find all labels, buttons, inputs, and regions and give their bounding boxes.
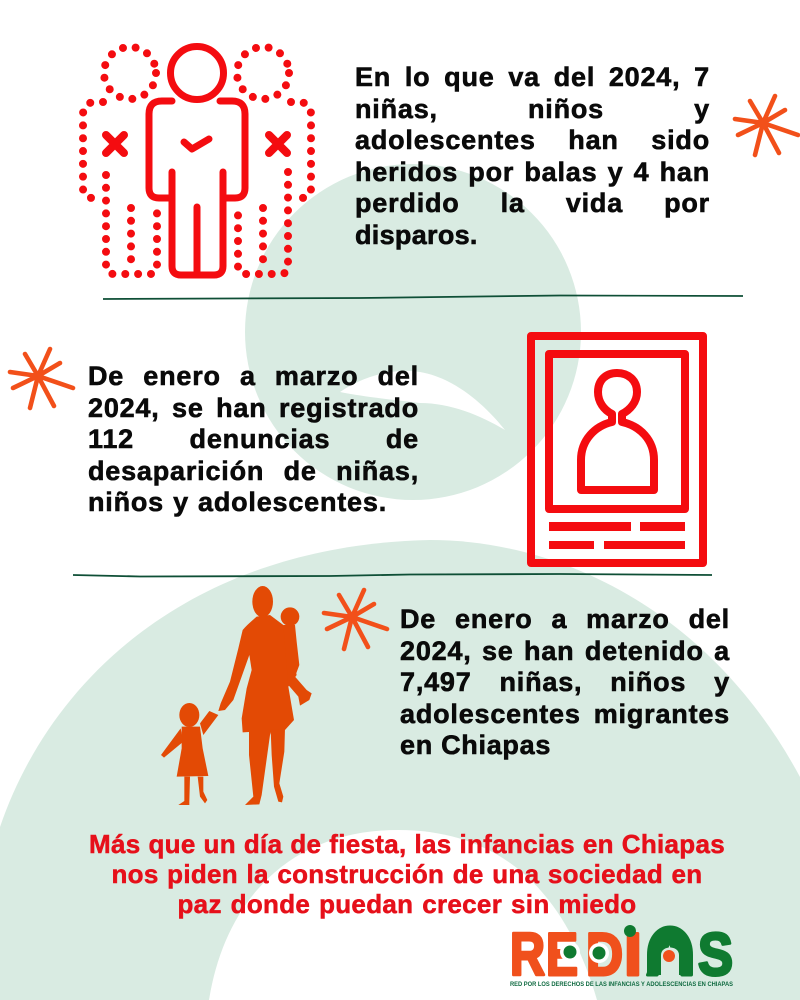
logo: REDIAS: D — [586, 921, 623, 988]
text block: wounded children: En lo que va del 2024, 7 — [355, 62, 710, 92]
text block: wounded children: heridos por balas y 4 han — [355, 157, 710, 187]
text block: disappearance reports: 112 denuncias de — [88, 424, 419, 454]
text block: detained migrants: en Chiapas — [400, 730, 551, 760]
text block: detained migrants: adolescentes migrantes — [400, 699, 730, 729]
text block: disappearance reports: desaparición de niñas, — [88, 456, 419, 486]
closing message — [89, 829, 725, 919]
text block: detained migrants: 7,497 niñas, niños y — [400, 667, 730, 697]
text block: detained migrants — [400, 604, 730, 760]
logo: REDIAS: RED POR LOS DERECHOS DE LAS INFANCIAS Y ADOLESCENCIAS EN CHIAPAS — [510, 981, 734, 988]
logo: REDIAS: R — [510, 921, 545, 988]
text block: wounded children: niñas, niños y — [355, 94, 710, 124]
text block: wounded children: adolescentes han sido — [355, 125, 710, 155]
text block: wounded children — [355, 62, 710, 250]
closing message: nos piden la construcción de una sociedad en — [112, 859, 702, 889]
centre person — [149, 46, 245, 275]
text block: detained migrants: De enero a marzo del — [400, 604, 730, 634]
text block: wounded children: perdido la vida por — [355, 188, 710, 218]
text block: wounded children: disparos. — [355, 220, 478, 250]
text block: disappearance reports — [88, 361, 419, 517]
closing message: Más que un día de fiesta, las infancias en Chiapas — [89, 829, 725, 859]
left dotted person — [83, 47, 157, 274]
text block: disappearance reports: 2024, se han registrado — [88, 393, 419, 423]
logo: REDIAS: E — [546, 921, 578, 988]
closing message: paz donde puedan crecer sin miedo — [178, 889, 636, 919]
right dotted person — [237, 47, 311, 274]
text block: detained migrants: 2024, se han detenido a — [400, 636, 730, 666]
text block: disappearance reports: De enero a marzo del — [88, 361, 419, 391]
logo: REDIAS: A — [646, 921, 693, 988]
logo: REDIAS: I — [624, 921, 642, 988]
icon: left cross — [106, 135, 124, 153]
logo: REDIAS: S — [698, 921, 733, 988]
icon: right cross — [269, 135, 287, 153]
text block: disappearance reports: niños y adolescentes. — [88, 487, 387, 517]
